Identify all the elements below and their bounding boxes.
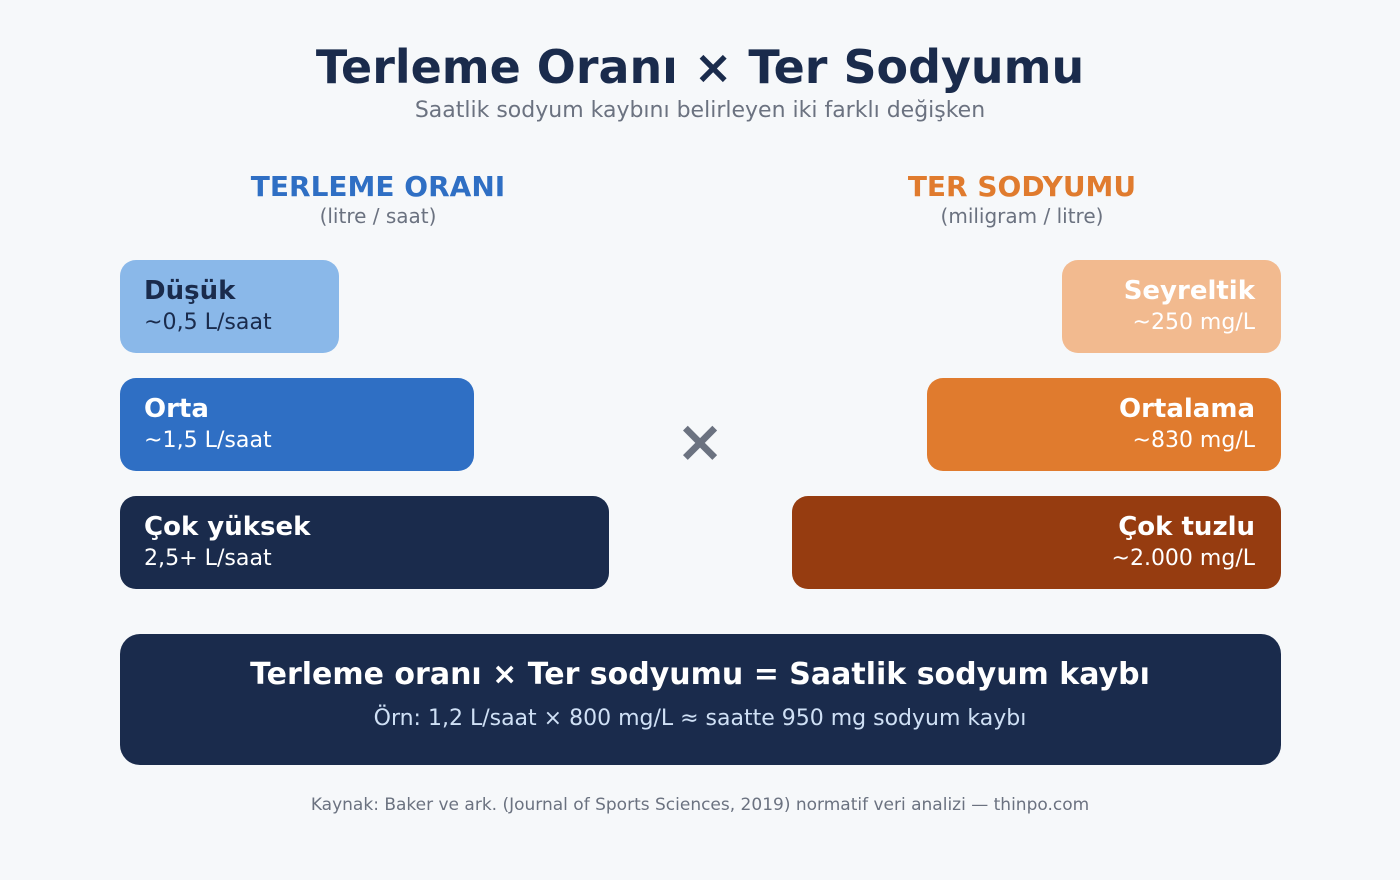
right column heading	[908, 170, 1136, 228]
subtitle: Saatlik sodyum kaybını belirleyen iki farklı değişken	[415, 98, 985, 123]
bar: dilute sweat sodium	[1062, 260, 1281, 353]
formula panel: Örn: 1,2 L/saat × 800 mg/L ≈ saatte 950 mg sodyum kaybı	[374, 705, 1026, 731]
bar: very salty sweat sodium	[792, 496, 1281, 589]
bar: low sweat rate: Düşük	[144, 276, 236, 306]
bar: very salty sweat sodium: ~2.000 mg/L	[1112, 546, 1256, 571]
bar: medium sweat rate: Orta	[144, 394, 209, 424]
title: Terleme Oranı × Ter Sodyumu	[316, 40, 1084, 94]
left column heading: (litre / saat)	[320, 204, 436, 228]
bar: dilute sweat sodium: Seyreltik	[1124, 276, 1256, 306]
formula panel: Terleme oranı × Ter sodyumu = Saatlik sodyum kaybı	[250, 657, 1150, 692]
bar: average sweat sodium: Ortalama	[1119, 394, 1255, 424]
source footer: Kaynak: Baker ve ark. (Journal of Sports Sciences, 2019) normatif veri analizi — thinpo.com	[311, 795, 1089, 815]
bar: average sweat sodium: ~830 mg/L	[1133, 428, 1256, 453]
icon: multiplication sign: ×	[676, 407, 724, 475]
bar: medium sweat rate	[120, 378, 474, 471]
left column heading: TERLEME ORANI	[251, 170, 505, 203]
right column heading: (miligram / litre)	[941, 204, 1103, 228]
left column heading	[251, 170, 505, 228]
bar: very high sweat rate: Çok yüksek	[144, 512, 311, 542]
bar: low sweat rate: ~0,5 L/saat	[144, 309, 272, 335]
bar: average sweat sodium	[927, 378, 1281, 471]
formula panel	[120, 634, 1281, 765]
bar: low sweat rate	[120, 260, 339, 353]
right column heading: TER SODYUMU	[908, 170, 1136, 203]
bar: very high sweat rate: 2,5+ L/saat	[144, 545, 272, 571]
bar: dilute sweat sodium: ~250 mg/L	[1133, 310, 1256, 335]
bar: medium sweat rate: ~1,5 L/saat	[144, 427, 272, 453]
bar: very high sweat rate	[120, 496, 609, 589]
bar: very salty sweat sodium: Çok tuzlu	[1118, 512, 1255, 542]
